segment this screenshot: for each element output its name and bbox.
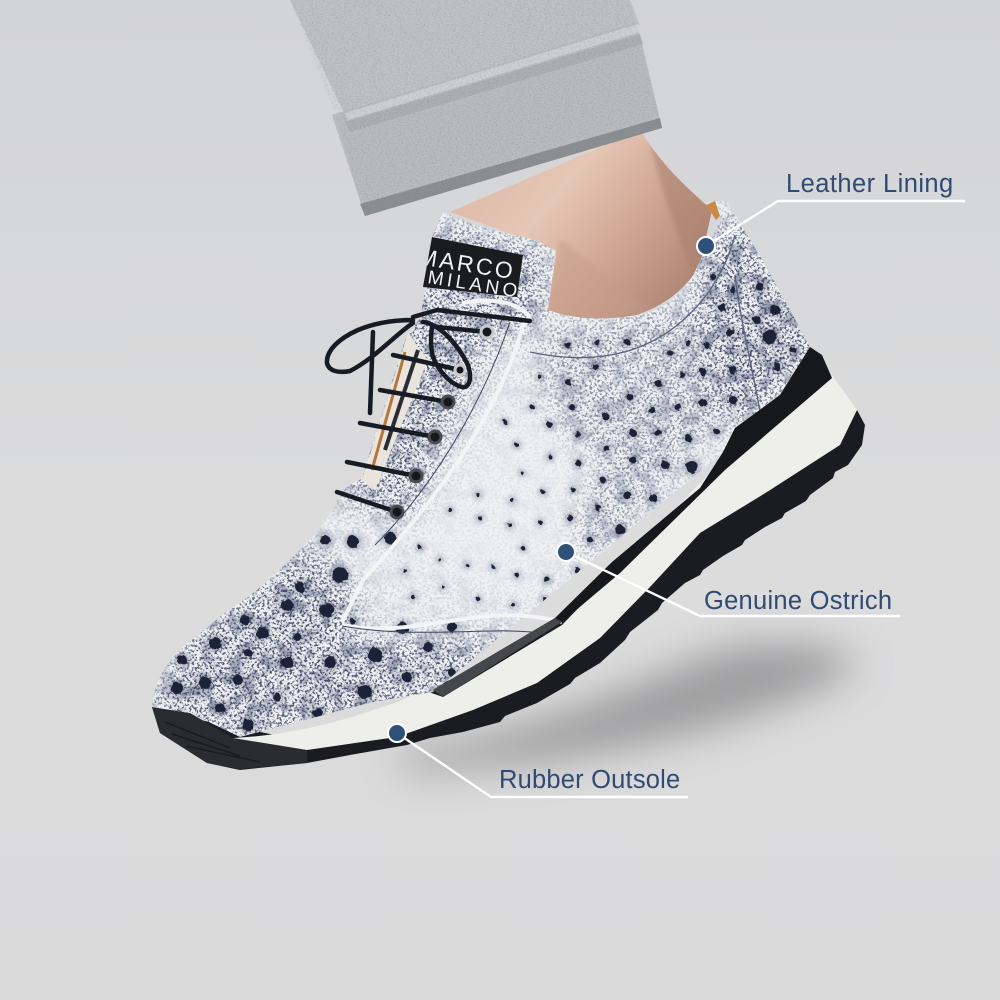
product photo infographic xyxy=(152,0,965,798)
collar brand tab xyxy=(423,237,523,297)
lace gap xyxy=(362,333,428,490)
laces xyxy=(327,310,530,512)
leather panels and seams xyxy=(342,235,760,634)
callout: Rubber Outsole: Rubber Outsole xyxy=(499,766,680,794)
collar brand tab: MARCO xyxy=(416,243,517,284)
collar brand tab: MILANO xyxy=(426,267,522,303)
ground shadow xyxy=(400,643,860,770)
callout: Rubber Outsole xyxy=(388,724,688,797)
white midsole xyxy=(233,375,857,750)
callout: Leather Lining xyxy=(697,170,965,255)
callout: Genuine Ostrich xyxy=(557,543,900,616)
ostrich quill dots xyxy=(171,274,796,731)
outsole xyxy=(152,410,865,770)
ankle xyxy=(450,130,716,325)
orange heel lining xyxy=(706,201,720,220)
eyelets xyxy=(391,326,493,518)
heel counter and sole rim xyxy=(433,347,832,697)
upper xyxy=(152,200,810,737)
trouser leg xyxy=(280,0,670,220)
callout: Leather Lining: Leather Lining xyxy=(786,170,954,198)
callout: Genuine Ostrich: Genuine Ostrich xyxy=(704,587,892,615)
